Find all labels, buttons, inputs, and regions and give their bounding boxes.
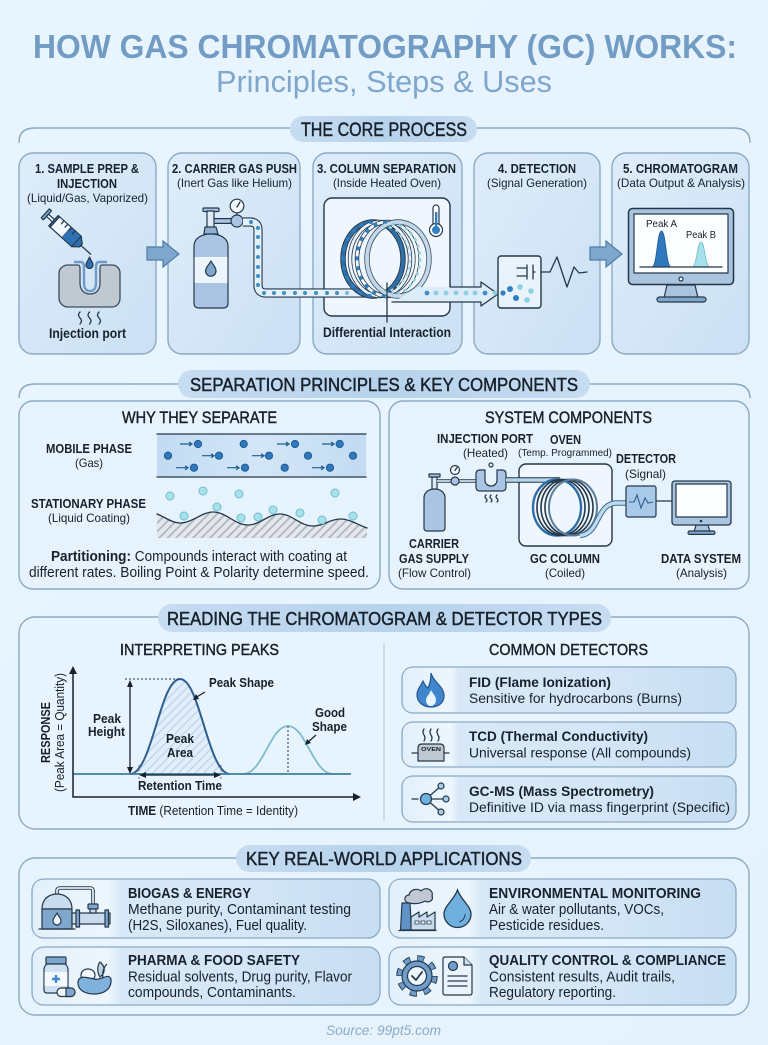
panel: why they separate: WHY THEY SEPARATE [122,408,277,427]
detector: fid: FID (Flame Ionization) [469,674,611,690]
detector: tcd [402,722,736,767]
title [33,28,737,99]
text: partitioning: different rates. Boiling Point & Polarity determine speed. [29,565,369,581]
icon: factory and cloud [399,889,436,930]
detector: fid [402,667,736,713]
title: HOW GAS CHROMATOGRAPHY (GC) WORKS: [33,28,737,65]
particles: separated compounds [425,284,534,303]
step 5 card: chromatogram [612,153,749,354]
annotation: peak shape [193,675,274,700]
axes [69,666,361,801]
text: partitioning [29,549,369,581]
icon: injection port [59,262,120,307]
application: pharma and food safety: Residual solvents, Drug purity, Flavor [128,970,352,986]
annotation: good shape [305,705,347,745]
diagram: detector [626,486,672,517]
icon: mass fingerprint network [412,783,449,815]
panel: system components: GAS SUPPLY [399,552,470,566]
step 3 card: column separation [313,153,462,354]
step 3 card: column separation: (Inside Heated Oven) [333,176,441,190]
panel: system components: GC COLUMN [530,552,600,566]
application: quality control and compliance: Consistent results, Audit trails, [489,970,675,986]
application: biogas and energy: Methane purity, Contaminant testing [128,902,351,918]
panel: system components: CARRIER [409,537,459,551]
step 3 card: column separation: Differential Interaction [323,325,451,340]
detector: fid: Sensitive for hydrocarbons (Burns) [469,690,682,706]
step 1 card: sample prep and injection: Injection port [49,326,126,341]
icon: monitor with peaks [628,208,734,302]
application: environmental monitoring: Pesticide residues. [489,918,604,934]
step 4 card: detection: 4. DETECTION [498,162,576,176]
step 1 card: sample prep and injection: (Liquid/Gas, Vaporized) [27,191,148,205]
panel: system components: (Flow Control) [398,566,471,580]
application: environmental monitoring: ENVIRONMENTAL MONITORING [489,885,701,902]
heading: applications: KEY REAL-WORLD APPLICATIONS [246,848,522,869]
step 1 card: sample prep and injection [19,153,156,354]
diagram: data system monitor [672,481,731,534]
annotation: peak area [166,731,195,760]
tube: column exit arrow [392,282,498,306]
icon: heat waves [78,312,100,324]
list: common detectors: COMMON DETECTORS [489,642,648,659]
arrow: step 1 to step 2 [147,241,179,267]
icon: thermal cell [412,729,449,761]
diagram: carrier gas cylinder [424,466,476,531]
section: reading the chromatogram and detector types [19,604,749,829]
icon: capsule [57,988,75,996]
peak a [130,679,230,774]
icon: food bowl [78,962,111,994]
section: key real-world applications [19,845,749,1015]
step 4 card: detection [474,153,600,354]
application: pharma and food safety: PHARMA & FOOD SAFETY [128,952,300,969]
icon: water drop [444,890,471,928]
panel: why they separate: (Liquid Coating) [48,511,130,525]
panel: system components: (Heated) [463,446,508,460]
detector: tcd: Universal response (All compounds) [469,744,691,760]
panel: system components [389,401,749,589]
source note: Source: 99pt5.com [326,1022,441,1038]
diagram: mobile phase band [157,434,366,477]
panel: system components: (Temp. Programmed) [518,447,612,459]
heading: separation principles: SEPARATION PRINCIPLES & KEY COMPONENTS [190,375,578,395]
icon: biogas tank and pipe [39,888,110,929]
application: quality control and compliance [389,947,736,1005]
axis label: response: (Peak Area = Quantity) [53,673,67,792]
icon: compliance document [443,957,472,995]
detector: gc-ms: GC-MS (Mass Spectrometry) [469,783,654,799]
diagram: oven and coil [506,464,628,546]
icon: droplet [86,257,93,268]
step 2 card: carrier gas push: 2. CARRIER GAS PUSH [172,162,297,176]
application: biogas and energy [32,879,380,938]
section: separation principles and key components [19,370,750,589]
annotation: good shape: Shape [312,719,347,734]
title: Principles, Steps & Uses [216,64,552,99]
step 2 card: carrier gas push [168,153,300,354]
panel: system components: (Coiled) [545,566,585,580]
icon: thermal cell: OVEN [421,747,441,753]
panel: why they separate: STATIONARY PHASE [31,497,146,511]
diagram: heated injection port [476,463,506,502]
panel: why they separate: MOBILE PHASE [46,442,132,456]
detector: gc-ms: Definitive ID via mass fingerprint (Specific) [469,799,730,815]
annotation: retention time: Retention Time [138,778,222,793]
annotation: peak area: Peak [166,731,195,746]
panel: system components: OVEN [550,433,581,447]
application: pharma and food safety: compounds, Contaminants. [128,985,296,1001]
icon: thermometer [430,205,442,236]
step 4 card: detection: (Signal Generation) [487,176,587,190]
tube: carrier gas into column [243,220,372,295]
panel: system components: (Analysis) [676,566,727,580]
application: quality control and compliance: Regulatory reporting. [489,985,616,1001]
heading: reading the chromatogram [158,604,611,632]
step 5 card: chromatogram: (Data Output & Analysis) [617,176,745,190]
panel: system components: SYSTEM COMPONENTS [485,408,652,427]
oven box [324,198,450,316]
annotation: peak height [88,680,133,774]
heading: the core process: THE CORE PROCESS [301,120,467,141]
heading: reading the chromatogram: READING THE CHROMATOGRAM & DETECTOR TYPES [167,609,602,629]
peak b [243,726,333,774]
annotation: peak height: Height [88,724,126,739]
annotation: peak shape: Peak Shape [209,675,274,690]
arrow: step 4 to step 5 [590,241,622,267]
icon: coiled column [343,222,429,296]
detector: gc-ms [402,776,736,822]
application: environmental monitoring: Air & water pollutants, VOCs, [489,902,664,918]
application: biogas and energy: BIOGAS & ENERGY [128,885,251,902]
chart: interpreting peaks [38,642,361,818]
application: environmental monitoring [389,879,736,938]
icon: flame [417,673,444,707]
axis label: response [38,673,67,792]
detector: tcd: TCD (Thermal Conductivity) [469,728,648,744]
panel: system components: DATA SYSTEM [661,552,741,566]
panel: why they separate: (Gas) [75,456,103,470]
panel: system components: INJECTION PORT [437,432,533,446]
icon: monitor with peaks: Peak A [646,218,677,230]
application: pharma and food safety [32,947,380,1005]
application: quality control and compliance: QUALITY CONTROL & COMPLIANCE [489,952,726,969]
icon: detector box with signal [498,256,587,308]
step 5 card: chromatogram: 5. CHROMATOGRAM [623,162,738,176]
text: partitioning: Partitioning: Compounds interact with coating at [51,549,347,565]
icon: medicine bottle [44,957,68,993]
annotation: peak height: Peak [93,711,122,726]
step 3 card: column separation: 3. COLUMN SEPARATION [317,162,456,176]
panel: system components: DETECTOR [616,452,676,466]
icon: gear with check [400,958,434,994]
list: common detectors [402,642,736,822]
diagram: stationary phase coating [157,487,367,538]
leader: differential interaction [386,283,388,322]
section: the core process [19,116,750,354]
annotation: peak area: Area [167,745,194,760]
axis label: response: RESPONSE [38,702,53,763]
application: biogas and energy: (H2S, Siloxanes), Fuel quality. [128,918,307,934]
step 1 card: sample prep and injection: INJECTION [57,177,117,191]
chart: interpreting peaks: INTERPRETING PEAKS [120,642,279,659]
step 1 card: sample prep and injection: 1. SAMPLE PREP & [35,162,139,176]
axis label: time: TIME (Retention Time = Identity) [128,803,298,818]
panel: why they separate [19,401,380,589]
heading: separation principles [178,370,590,398]
icon: gas cylinder with regulator [194,199,244,308]
annotation: good shape: Good [315,705,345,720]
icon: syringe [41,208,95,259]
panel: system components: (Signal) [625,467,666,481]
step 2 card: carrier gas push: (Inert Gas like Helium) [177,176,292,190]
annotation: retention time [138,772,222,793]
icon: monitor with peaks: Peak B [686,229,716,241]
heading: the core process [290,116,477,142]
